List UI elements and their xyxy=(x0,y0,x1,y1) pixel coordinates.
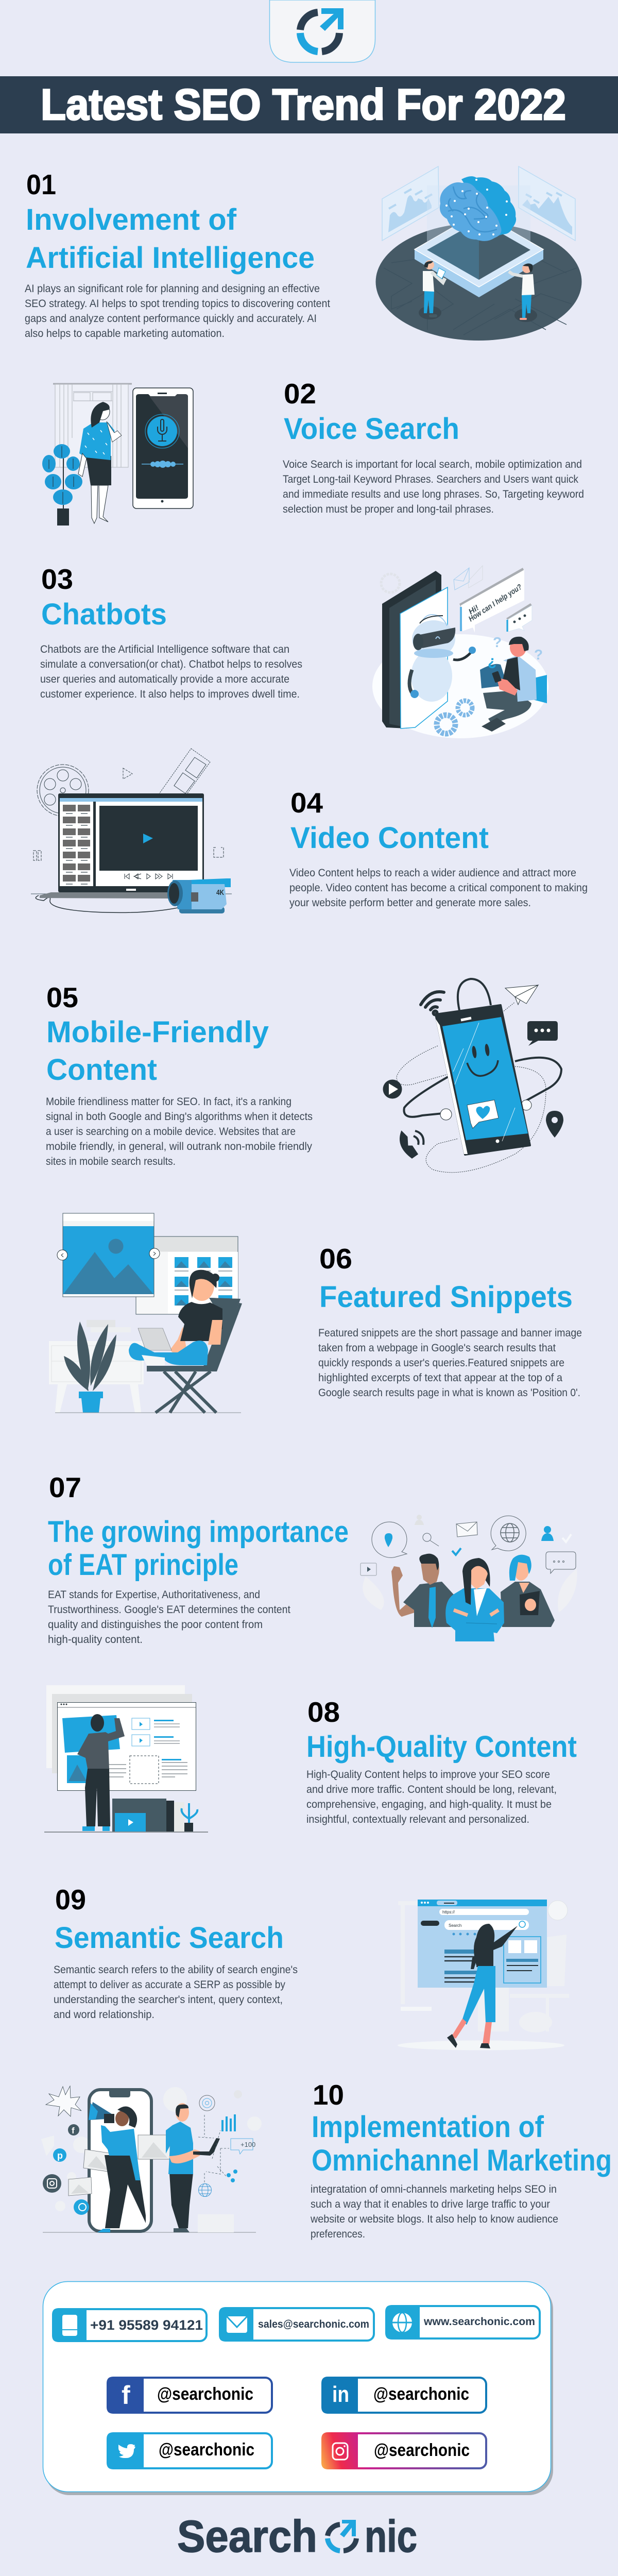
body text 03 xyxy=(40,643,302,700)
chair xyxy=(147,1298,242,1413)
page thumbnails xyxy=(67,1718,187,1784)
heading 05 xyxy=(46,1015,269,1087)
woman with megaphone xyxy=(89,2102,146,2232)
number 06: 06 xyxy=(319,1243,352,1275)
heading 02: Voice Search xyxy=(284,412,459,446)
icon: play button xyxy=(383,1080,402,1098)
body text 10: website or website blogs. It also help to know audience xyxy=(310,2213,558,2225)
number 09: 09 xyxy=(55,1884,86,1916)
facebook button: @searchonic xyxy=(157,2384,253,2404)
icon: bars xyxy=(221,2114,236,2131)
ground line xyxy=(55,1412,241,1413)
email button: sales@searchonic.com xyxy=(258,2318,369,2330)
illustration: laptop and camera xyxy=(31,749,232,913)
body text 10: such a way that it enables to drive large traffic to your xyxy=(311,2198,550,2210)
heading 05: Mobile-Friendly xyxy=(46,1015,269,1049)
burst xyxy=(46,2086,81,2116)
typing bubble xyxy=(506,603,532,632)
contact panel xyxy=(43,2281,553,2495)
social icons: p xyxy=(57,2150,63,2161)
robot xyxy=(409,615,476,702)
smiley xyxy=(471,1044,490,1058)
envelopes xyxy=(454,566,483,590)
icon: microphone xyxy=(145,414,179,448)
chart panel right xyxy=(519,166,575,241)
body text 06: Featured snippets are the short passage and banner image xyxy=(318,1327,582,1339)
section 05: mobile-friendly content xyxy=(46,979,563,1173)
illustration: man editing content page xyxy=(44,1685,208,1832)
speech bubble xyxy=(459,568,524,633)
faded background furniture xyxy=(398,1901,569,2032)
blue content block xyxy=(62,1715,120,1753)
website button xyxy=(385,2305,540,2340)
laptop xyxy=(40,793,204,899)
speech bubble: How can I help you? xyxy=(467,583,524,623)
body text 08: insightful, contextually relevant and personalized. xyxy=(306,1814,529,1825)
brand logo footer: nic xyxy=(365,2512,417,2562)
ground and cable xyxy=(31,893,232,894)
ground ellipse xyxy=(398,2040,564,2050)
body text 09 xyxy=(54,1964,298,2021)
body text 01: SEO strategy. AI helps to spot trending topics to discovering content xyxy=(25,298,330,310)
heading 03: Chatbots xyxy=(41,598,167,631)
dotted orbit lines xyxy=(397,1002,546,1173)
person left xyxy=(419,260,445,319)
body text 07 xyxy=(48,1589,290,1646)
body text 10: integratation of omni-channels marketing helps SEO in xyxy=(311,2183,557,2195)
logo card xyxy=(270,0,375,62)
section 04: video content xyxy=(31,749,588,913)
film reel xyxy=(37,765,89,816)
section 10: omnichannel marketing xyxy=(41,2079,612,2240)
number 02: 02 xyxy=(284,378,316,410)
heading 07: of EAT principle xyxy=(48,1548,238,1582)
phone with robot xyxy=(382,571,448,728)
body text 02: selection must be proper and long-tail phrases. xyxy=(283,503,494,515)
heading 06: Featured Snippets xyxy=(319,1280,573,1314)
number 10: 10 xyxy=(313,2079,344,2111)
body text 08: and drive more traffic. Content should be long, relevant, xyxy=(306,1784,557,1795)
facebook button xyxy=(107,2377,272,2414)
icon: share xyxy=(227,2170,237,2182)
heading 01: Involvement of xyxy=(26,203,237,236)
illustration: woman using voice search on phone xyxy=(42,384,193,526)
dresser xyxy=(49,1320,144,1413)
gears xyxy=(381,574,472,734)
body text 05: signal in both Google and Bing's algorithms when it detects xyxy=(46,1111,313,1123)
person right xyxy=(509,263,537,322)
illustration: woman using search page xyxy=(398,1900,569,2050)
number 01: 01 xyxy=(26,168,56,200)
question marks: ¿ xyxy=(488,653,496,669)
platform xyxy=(415,212,543,297)
heading 04: Video Content xyxy=(290,821,489,855)
number 07: 07 xyxy=(49,1471,81,1503)
icon: like bubble: +100 xyxy=(241,2141,255,2148)
heading 07: The growing importance xyxy=(48,1515,349,1549)
section 08: high-quality content xyxy=(44,1685,577,1832)
body text 02: and immediate results and use long phrases. So, Targeting keyword xyxy=(283,488,584,500)
section 03: chatbots xyxy=(40,563,548,738)
brand logo footer: Search xyxy=(177,2512,317,2562)
body text 01: AI plays an significant role for planning and designing an effective xyxy=(25,283,320,295)
linkedin button: @searchonic xyxy=(373,2384,469,2404)
number 08: 08 xyxy=(307,1696,340,1728)
seated woman xyxy=(129,1270,222,1365)
body text 06: taken from a webpage in Google's search results that xyxy=(318,1342,556,1354)
icon: target xyxy=(199,2095,215,2111)
curtain and window xyxy=(53,384,132,467)
icon: wifi xyxy=(421,992,444,1014)
number 03: 03 xyxy=(41,563,73,595)
body text 09: understanding the searcher's intent, query context, xyxy=(54,1994,283,2006)
section 02: voice search xyxy=(42,378,584,526)
brand logo footer xyxy=(177,2512,417,2562)
body text 08 xyxy=(306,1769,557,1825)
body text 07: quality and distinguishes the poor content from xyxy=(48,1619,263,1631)
website button: www.searchonic.com xyxy=(423,2316,535,2328)
woman right xyxy=(501,1555,555,1627)
blue image window xyxy=(57,1213,160,1297)
icon: paper plane xyxy=(505,985,538,1005)
body text 07: Trustworthiness. Google's EAT determines the content xyxy=(48,1604,290,1616)
earphone cable xyxy=(404,979,561,1117)
body text 08: comprehensive, engaging, and high-quality. It must be xyxy=(306,1799,552,1810)
body text 09: Semantic search refers to the ability of search engine's xyxy=(54,1964,298,1976)
linkedin button: in xyxy=(332,2382,349,2407)
email button xyxy=(219,2307,374,2342)
faded background shapes xyxy=(41,2087,262,2232)
body text 10 xyxy=(310,2183,558,2240)
speech bubble: Hi! xyxy=(467,603,480,616)
camera: 4K xyxy=(216,888,224,897)
chart panel left xyxy=(382,166,439,241)
man waving xyxy=(391,1554,454,1628)
twitter button xyxy=(107,2432,272,2469)
body text 07: EAT stands for Expertise, Authoritativeness, and xyxy=(48,1589,260,1601)
woman xyxy=(78,402,122,523)
title banner xyxy=(0,76,618,133)
section 01: artificial intelligence xyxy=(25,166,582,341)
icon: telephone xyxy=(401,1131,423,1158)
icon: globe xyxy=(199,2183,211,2197)
icon: chat bubble xyxy=(527,1021,558,1046)
body text 06 xyxy=(318,1327,582,1399)
body text 08: High-Quality Content helps to improve your SEO score xyxy=(306,1769,550,1781)
body text 04: people. Video content has become a critical component to making xyxy=(289,882,588,894)
sound wave xyxy=(142,461,183,468)
man xyxy=(77,1714,125,1831)
instagram button: @searchonic xyxy=(374,2441,470,2460)
camera xyxy=(167,878,231,913)
section 07: EAT principle xyxy=(48,1471,577,1646)
question marks xyxy=(488,634,543,669)
person with phone xyxy=(480,637,547,732)
icon: globe xyxy=(548,1901,568,1920)
icon: like bubble xyxy=(231,2139,255,2154)
linkedin button xyxy=(321,2377,486,2414)
body text 03: user queries and automatically provide a more accurate xyxy=(40,673,289,685)
video controls xyxy=(125,874,173,879)
woman centre xyxy=(445,1558,504,1641)
thumbnails xyxy=(63,805,90,882)
plant xyxy=(64,1321,116,1413)
dashed connectors xyxy=(198,2115,229,2183)
body text 06: quickly responds a user's queries.Featured snippets are xyxy=(318,1357,564,1369)
icon: location pin xyxy=(546,1111,563,1138)
icon: searchonic mark xyxy=(300,8,344,52)
heading 05: Content xyxy=(46,1053,157,1087)
facebook button: f xyxy=(122,2381,130,2410)
body text 02 xyxy=(283,459,584,515)
browser panel: https:// xyxy=(442,1910,455,1914)
icon: white check xyxy=(562,1534,571,1542)
photo cards xyxy=(68,2135,170,2196)
body text 05: a user is searching on a mobile device. Websites that are xyxy=(46,1126,296,1138)
back window xyxy=(136,1236,238,1314)
phone button xyxy=(52,2308,207,2342)
section 06: featured snippets xyxy=(49,1213,582,1413)
body text 03: Chatbots are the Artificial Intelligence software that can xyxy=(40,643,289,655)
icon: user xyxy=(541,1526,554,1541)
browser panel xyxy=(418,1900,547,1988)
illustration: smiling phone with icons xyxy=(383,979,563,1173)
body text 06: Google search results page in what is known as 'Position 0'. xyxy=(318,1387,580,1399)
heading 09: Semantic Search xyxy=(55,1921,284,1955)
illustration: three professionals with icons xyxy=(360,1515,577,1641)
icon bubbles xyxy=(360,1516,576,1575)
icon: location pin xyxy=(385,1533,392,1547)
twitter button: @searchonic xyxy=(159,2440,254,2460)
brain xyxy=(440,176,516,241)
heading 01 xyxy=(26,203,315,275)
icon: blue check xyxy=(452,1548,461,1555)
social icons xyxy=(43,2124,89,2215)
media cards xyxy=(112,1799,197,1832)
body text 10: preferences. xyxy=(311,2228,365,2240)
browser panel: Search xyxy=(449,1923,461,1928)
body text 09: and word relationship. xyxy=(54,2009,154,2021)
number 04: 04 xyxy=(290,787,323,819)
body text 03: customer experience. It also helps to improves dwell time. xyxy=(40,688,300,700)
body text 07: high-quality content. xyxy=(48,1634,143,1646)
body text 04: your website perform better and generate more sales. xyxy=(289,897,531,909)
heading 10: Implementation of xyxy=(312,2110,544,2144)
woman xyxy=(447,1924,518,2048)
man with laptop xyxy=(166,2103,220,2232)
icon: searchonic mark xyxy=(328,2520,356,2551)
phone xyxy=(89,2090,151,2231)
body text 01: also helps to capable marketing automation. xyxy=(25,328,225,340)
body text 05 xyxy=(46,1096,313,1167)
heading 07 xyxy=(48,1515,349,1582)
heading 01: Artificial Intelligence xyxy=(26,241,315,275)
body text 03: simulate a conversation(or chat). Chatbot helps to resolves xyxy=(40,658,302,670)
illustration: woman with image snippets xyxy=(49,1213,242,1413)
film strip xyxy=(158,749,210,796)
result card xyxy=(504,1937,541,1983)
question marks: ? xyxy=(493,634,502,650)
number 05: 05 xyxy=(46,981,78,1013)
faded leaves xyxy=(363,1569,577,1613)
heading 08: High-Quality Content xyxy=(306,1730,577,1764)
body text 05: Mobile friendliness matter for SEO. In fact, it's a ranking xyxy=(46,1096,291,1108)
illustration: AI brain on platform xyxy=(376,166,582,341)
illustration: omnichannel people and icons xyxy=(41,2086,262,2232)
body text 09: attempt to deliver as accurate a SERP as possible by xyxy=(54,1979,285,1991)
body text 01: gaps and analyze content performance quickly and accurately. AI xyxy=(25,313,317,325)
phone xyxy=(436,1005,530,1155)
question marks: ? xyxy=(534,647,543,663)
icon: faded user xyxy=(415,1515,424,1525)
body text 04 xyxy=(289,867,588,909)
body text 05: mobile friendly, in general, will outrank non-mobile friendly xyxy=(46,1141,312,1153)
plant xyxy=(42,444,82,526)
body text 02: Target Long-tail Keyword Phrases. Searchers and Users want quick xyxy=(283,473,578,485)
title: Latest SEO Trend For 2022 xyxy=(41,80,566,129)
phone xyxy=(133,388,193,509)
instagram button xyxy=(321,2432,486,2469)
body text 06: highlighted excerpts of text that appear at the top of a xyxy=(318,1372,562,1384)
body text 02: Voice Search is important for local search, mobile optimization and xyxy=(283,459,582,470)
phone button: +91 95589 94121 xyxy=(90,2317,203,2333)
body text 01 xyxy=(25,283,330,340)
section 09: semantic search xyxy=(54,1884,569,2050)
body text 04: Video Content helps to reach a wider audience and attract more xyxy=(289,867,576,879)
body text 05: sites in mobile search results. xyxy=(46,1156,176,1167)
heart bubble xyxy=(467,1100,499,1128)
social icons: f xyxy=(72,2126,75,2136)
illustration: chatbot and user xyxy=(372,566,548,738)
heading 10 xyxy=(312,2110,612,2177)
